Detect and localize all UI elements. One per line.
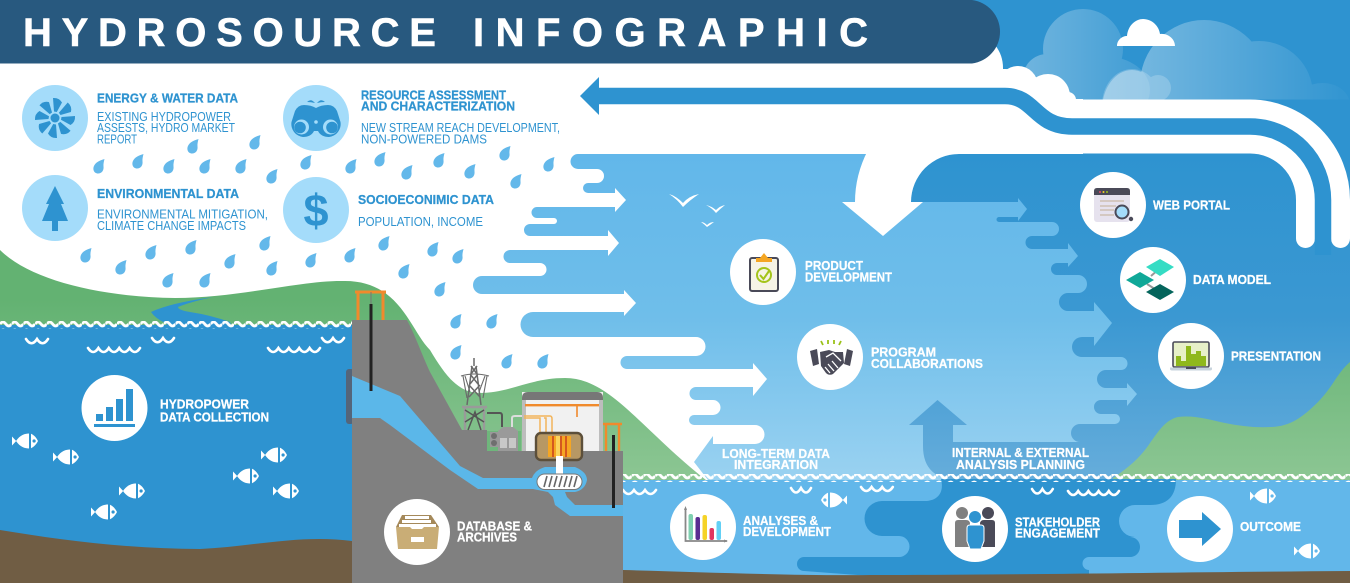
label: ANALYSES & (743, 513, 818, 528)
label (160, 396, 269, 424)
blue return arrow (580, 77, 1323, 255)
icon: diamonds (1120, 247, 1186, 313)
description: POPULATION, INCOME (358, 215, 483, 229)
icon: clipboard (730, 239, 796, 305)
description: ASSESTS, HYDRO MARKET (97, 121, 235, 135)
title: INFOGRAPHIC (473, 11, 880, 55)
river (151, 297, 232, 327)
generator (536, 433, 582, 476)
dark underwater stream (797, 479, 1176, 576)
fish school left (12, 434, 299, 520)
label: PROGRAM (871, 345, 936, 360)
light blue data stream (473, 154, 1200, 480)
heading: SOCIOECONIMIC DATA (358, 192, 495, 207)
label: DATA COLLECTION (160, 410, 269, 424)
label: HYDROPOWER (160, 396, 250, 412)
icon: handshake (797, 324, 863, 390)
label: OUTCOME (1240, 519, 1301, 534)
panel: stakeholder engagement (942, 496, 1101, 562)
label (805, 258, 892, 284)
panel: outcome (1167, 496, 1301, 562)
icon: multicolour bar chart (670, 494, 736, 560)
dark blue data stream with arrows (909, 154, 1350, 480)
transmission tower (461, 358, 523, 430)
label (1015, 515, 1101, 541)
dam body (352, 320, 623, 583)
icon: laptop chart (1158, 323, 1224, 389)
small white cloud (1117, 19, 1175, 46)
description: NON-POWERED DAMS (361, 132, 487, 146)
label: internal and external analysis planning: INTERNAL & EXTERNAL (952, 445, 1089, 460)
panel: data model (1120, 247, 1271, 313)
right waterline (623, 474, 1350, 482)
label: PRESENTATION (1231, 348, 1321, 364)
right water (623, 480, 1350, 583)
panel: presentation (1158, 323, 1321, 389)
soil right (623, 570, 1350, 583)
label: ENGAGEMENT (1015, 526, 1100, 541)
panel: environmental data (22, 175, 268, 241)
intake gate (355, 292, 386, 391)
description (97, 110, 235, 146)
title: HYDROSOURCE (23, 11, 446, 55)
panel: resource assessment (283, 85, 560, 151)
label: long-term data integration: LONG-TERM DATA (722, 446, 831, 461)
heading (361, 88, 515, 114)
panel: hydropower data collection (82, 375, 269, 441)
label: PRODUCT (805, 258, 863, 273)
left green hills (0, 250, 706, 480)
powerhouse (522, 392, 603, 451)
sky background (960, 0, 1350, 160)
birds (669, 194, 725, 227)
rain drops (80, 135, 555, 368)
icon: arrow (1167, 496, 1233, 562)
trash rack (346, 369, 354, 424)
label: long-term data integration: INTEGRATION (734, 457, 818, 472)
description: ENVIRONMENTAL MITIGATION, (97, 208, 268, 222)
label: WEB PORTAL (1153, 198, 1230, 212)
heading: ENERGY & WATER DATA (97, 90, 239, 106)
title bar (0, 0, 1000, 64)
label: DEVELOPMENT (743, 524, 831, 539)
icon: people (942, 496, 1008, 562)
panel: web portal (1080, 172, 1230, 238)
label: long-term data integration (722, 446, 831, 472)
icon: dollar: $ (303, 185, 329, 236)
description: REPORT (97, 132, 137, 146)
penstock water channel (352, 376, 623, 516)
icon: turbine fan (22, 85, 88, 151)
label: internal and external analysis planning: ANALYSIS PLANNING (956, 457, 1085, 472)
icon: browser window (1080, 172, 1146, 238)
label (457, 519, 532, 545)
description (97, 208, 268, 233)
dam structure (346, 292, 623, 583)
label: DATABASE & (457, 519, 532, 534)
icon: dollar (283, 177, 349, 243)
left reservoir ripples (26, 338, 344, 352)
description (361, 121, 560, 146)
panel: program collaborations (797, 324, 983, 390)
background clouds (1026, 9, 1333, 100)
label (743, 513, 831, 539)
white cloud bank behind title (960, 45, 1083, 154)
label: DATA MODEL (1193, 272, 1271, 287)
white return pipe (960, 96, 1340, 238)
turbine (537, 474, 582, 490)
white downward arrow (842, 150, 959, 236)
icon: tree (22, 175, 88, 241)
heading: AND CHARACTERIZATION (361, 98, 515, 114)
icon: file drawer (384, 499, 450, 565)
description: CLIMATE CHANGE IMPACTS (97, 219, 246, 233)
label: DEVELOPMENT (805, 270, 892, 284)
right green hill (1113, 362, 1350, 480)
heading: ENVIRONMENTAL DATA (97, 186, 240, 201)
description: NEW STREAM REACH DEVELOPMENT, (361, 121, 560, 135)
panel: database and archives (384, 499, 532, 565)
panel: analyses and development (670, 494, 831, 560)
right water ripples (623, 487, 1119, 495)
left reservoir water (0, 325, 353, 583)
label: COLLABORATIONS (871, 356, 983, 371)
icon: bar chart (82, 375, 148, 441)
left waterline (0, 321, 353, 329)
label: ARCHIVES (457, 530, 517, 545)
icon: binoculars (283, 85, 349, 151)
label (871, 345, 983, 371)
label: STAKEHOLDER (1015, 515, 1101, 530)
tailrace gate (603, 424, 622, 508)
panel: socioeconomic data (283, 177, 495, 243)
panel: energy and water data (22, 85, 239, 151)
panel: product development (730, 239, 892, 305)
soil left (0, 530, 352, 583)
heading: RESOURCE ASSESSMENT (361, 88, 506, 102)
description: EXISTING HYDROPOWER (97, 110, 231, 124)
fish right water (821, 488, 1320, 558)
label: internal and external analysis planning (952, 445, 1089, 472)
substation and transformer (487, 427, 521, 451)
